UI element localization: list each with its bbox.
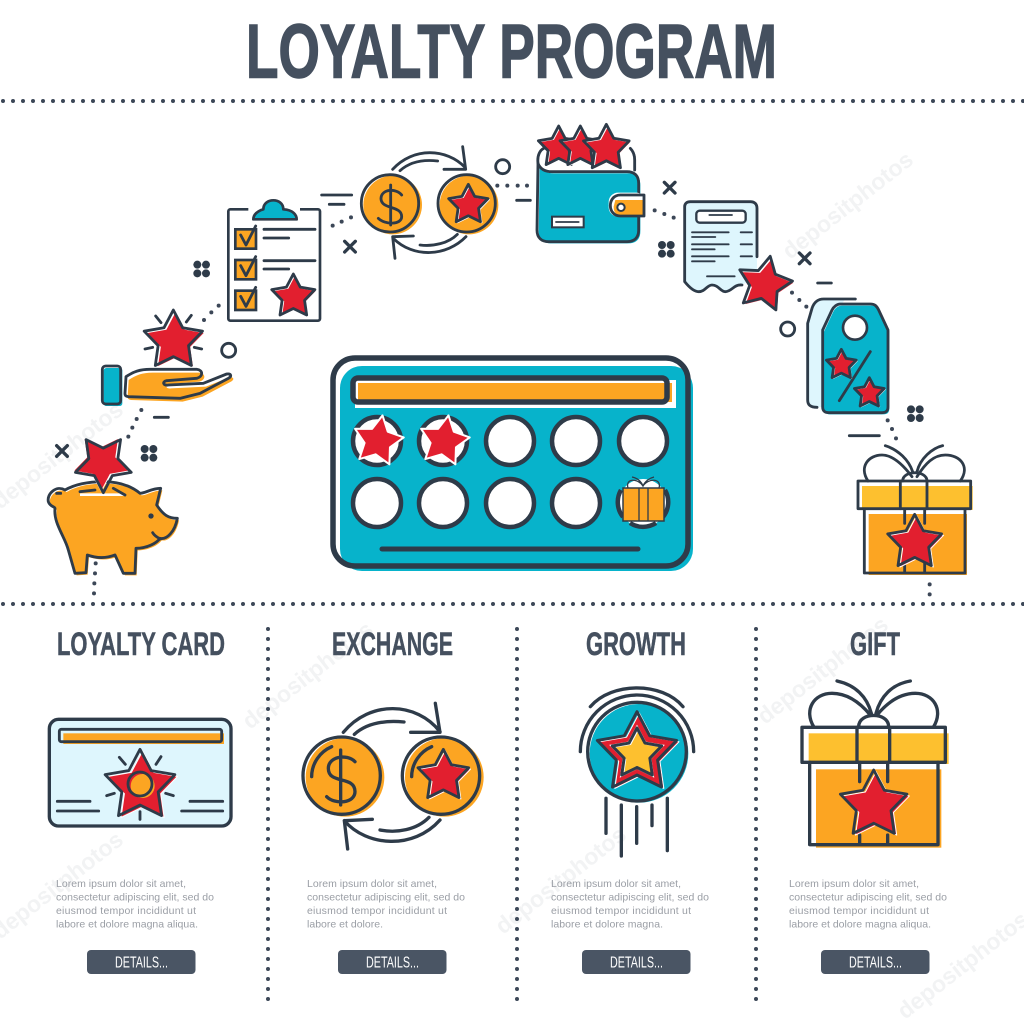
text: depositphotos: [777, 146, 918, 264]
button: details: DETAILS...: [115, 954, 168, 972]
icon: receipt: [685, 202, 799, 314]
text: growth description: labore et dolore magna.: [551, 918, 663, 930]
text: growth description: consectetur adipiscing elit, sed do: [551, 892, 709, 904]
panel: growth column: [551, 626, 709, 974]
text: depositphotos: [752, 611, 893, 729]
icon: rising star: [580, 688, 694, 856]
text: loyalty card description: labore et dolore magna aliqua.: [56, 918, 198, 930]
text: gift description: Lorem ipsum dolor sit amet,: [789, 878, 919, 890]
text: gift description: consectetur adipiscing elit, sed do: [789, 892, 947, 904]
panel: gift column: [789, 626, 949, 974]
stamp slots: [353, 417, 668, 527]
text: loyalty card description: Lorem ipsum dolor sit amet,: [56, 878, 186, 890]
earned stars: [350, 411, 473, 466]
card stripe: [353, 378, 676, 408]
text: exchange description: eiusmod tempor incididunt ut: [307, 905, 447, 917]
button: details: [821, 950, 930, 974]
text: exchange description: labore et dolore.: [307, 918, 383, 930]
heading: growth: GROWTH: [586, 626, 686, 662]
panel: central stamp card: [333, 358, 693, 571]
text: loyalty card description: [56, 878, 214, 930]
heading: exchange: EXCHANGE: [332, 626, 453, 662]
button: details: [582, 950, 690, 974]
button: details: DETAILS...: [849, 954, 902, 972]
icon: loyalty card: [49, 719, 231, 826]
button: details: [87, 950, 196, 974]
panel: loyalty card column: [49, 626, 231, 974]
icon: hand holding star: [102, 310, 233, 406]
heading: loyalty card: LOYALTY CARD: [57, 626, 225, 662]
text: gift description: [789, 878, 947, 930]
text: exchange description: [307, 878, 465, 930]
panel: loyalty journey left half: [48, 147, 510, 595]
text: depositphotos: [490, 821, 631, 939]
button: details: DETAILS...: [610, 954, 663, 972]
connectors and accents right: [516, 182, 932, 596]
icon: piggy bank: [48, 438, 179, 575]
text: depositphotos: [237, 616, 378, 734]
text: loyalty card description: consectetur adipiscing elit, sed do: [56, 892, 214, 904]
icon: coin exchange: [361, 147, 498, 258]
text: loyalty card description: eiusmod tempor incididunt ut: [56, 905, 196, 917]
title: LOYALTY PROGRAM: [246, 10, 777, 94]
panel: loyalty journey right half: [516, 124, 973, 596]
heading: gift: GIFT: [850, 626, 900, 662]
icon: checklist clipboard: [228, 200, 320, 321]
text: exchange description: Lorem ipsum dolor sit amet,: [307, 878, 437, 890]
icon: discount tags: [808, 299, 889, 414]
text: exchange description: consectetur adipiscing elit, sed do: [307, 892, 465, 904]
icon: gift box: [858, 446, 973, 575]
text: growth description: Lorem ipsum dolor sit amet,: [551, 878, 681, 890]
connectors and accents left: [57, 160, 510, 595]
text: gift description: eiusmod tempor incididunt ut: [789, 905, 929, 917]
icon: large gift box: [802, 681, 949, 848]
text: gift description: labore et dolore magna aliqua.: [789, 918, 931, 930]
button: details: [338, 950, 446, 974]
text: growth description: eiusmod tempor incididunt ut: [551, 905, 691, 917]
text: growth description: [551, 878, 709, 930]
card gift slot: [623, 477, 664, 521]
icon: wallet with stars: [537, 124, 645, 243]
button: details: DETAILS...: [366, 954, 419, 972]
text: depositphotos: [492, 391, 633, 509]
panel: exchange column: [303, 626, 484, 974]
icon: exchange coins: [303, 703, 484, 849]
